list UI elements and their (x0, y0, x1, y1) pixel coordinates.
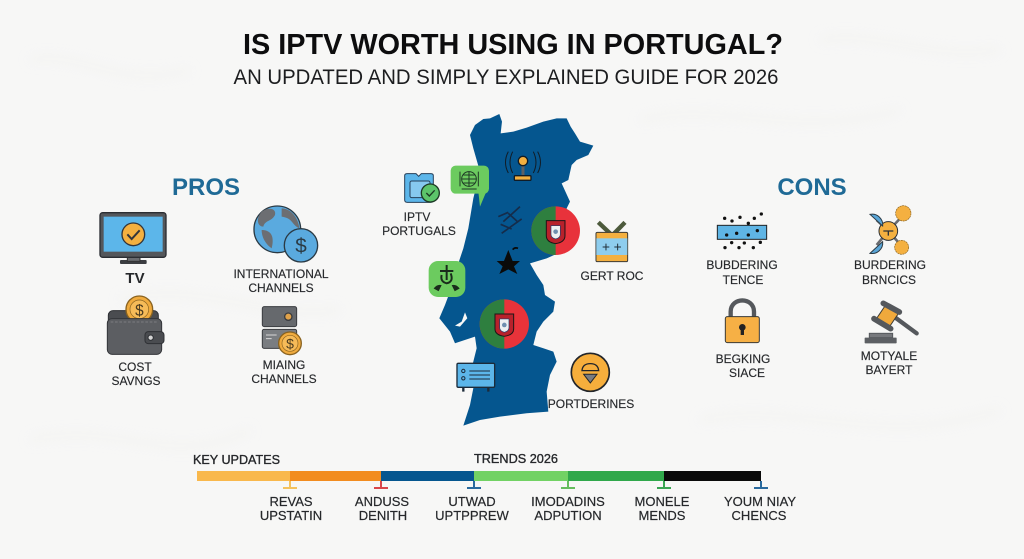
milestone 2: DENITH (359, 508, 407, 523)
label: mining channels: CHANNELS (251, 372, 317, 386)
label: motyale bayert: BAYERT (866, 363, 913, 377)
title: IS IPTV WORTH USING IN PORTUGAL? (243, 29, 783, 61)
label: begking siace: BEGKING (716, 352, 770, 366)
heading: key updates: KEY UPDATES (193, 452, 280, 467)
milestone 1: REVAS (269, 494, 313, 509)
label: burdering brncics: BRNCICS (862, 273, 916, 287)
icon: padlock (725, 300, 759, 343)
label: cost savings: COST (118, 360, 152, 374)
icon: portugal flag badge south (480, 299, 529, 349)
label: gert roc: GERT ROC (581, 269, 644, 283)
icon: tablet device (405, 174, 439, 202)
milestone 6: CHENCS (732, 508, 787, 523)
icon: message panel (457, 363, 495, 392)
label: burdering brncics: BURDERING (854, 258, 926, 272)
icon: orange badge (571, 353, 609, 391)
icon: wallet with coin (107, 296, 164, 354)
label: tv: TV (125, 270, 145, 287)
icon: wallet with coin: $ (135, 302, 144, 319)
label: cost savings: SAVNGS (111, 374, 161, 388)
milestone 6: YOUM NIAY (724, 494, 796, 509)
subtitle: AN UPDATED AND SIMPLY EXPLAINED GUIDE FOR 2026 (234, 66, 778, 89)
milestone 4: IMODADINS (531, 494, 605, 509)
label: motyale bayert: MOTYALE (861, 349, 917, 363)
icon: connected nodes (870, 206, 911, 254)
icon: broadcast antenna (505, 152, 540, 180)
heading: cons: CONS (777, 174, 847, 201)
label: mining channels: MIAING (263, 358, 305, 372)
timeline (193, 451, 796, 523)
icon: server with coin (262, 307, 301, 355)
label: international channels: INTERNATIONAL (233, 267, 329, 281)
icon: green globe bubble (451, 166, 489, 207)
timeline ticks (283, 481, 768, 488)
label: bubdering tence: TENCE (723, 273, 763, 287)
label: portderines: PORTDERINES (548, 397, 634, 411)
milestone 3: UPTPPREW (435, 508, 510, 523)
icon: globe with coin (254, 206, 318, 262)
icon: green accessibility badge (429, 261, 465, 297)
icon: satellite sketch (498, 207, 522, 233)
panel: cons (706, 174, 926, 380)
milestone 5: MENDS (639, 508, 686, 523)
milestone 4: ADPUTION (534, 508, 602, 523)
heading: trends 2026: TRENDS 2026 (474, 451, 558, 466)
icon: tv with check (100, 213, 166, 264)
milestone 3: UTWAD (448, 494, 496, 509)
icon: gavel (865, 303, 917, 343)
icon: toolbox (596, 222, 628, 262)
icon: server with coin: $ (286, 336, 294, 352)
timeline bar (197, 471, 761, 481)
label: begking siace: SIACE (729, 366, 765, 380)
icon: buffering bar (717, 212, 767, 249)
label: iptv portugals: PORTUGALS (382, 224, 456, 238)
milestone 1: UPSTATIN (260, 508, 322, 523)
icon: black star (497, 250, 520, 274)
label: bubdering tence: BUBDERING (706, 258, 778, 272)
map of portugal (405, 114, 628, 426)
icon: globe with coin: $ (295, 235, 307, 258)
icon: portugal flag badge north (531, 206, 580, 255)
label: international channels: CHANNELS (248, 281, 314, 295)
milestone 5: MONELE (635, 494, 690, 509)
panel: pros (100, 174, 329, 388)
heading: pros: PROS (172, 174, 240, 201)
label: iptv portugals: IPTV (404, 210, 430, 224)
milestone 2: ANDUSS (355, 494, 409, 509)
